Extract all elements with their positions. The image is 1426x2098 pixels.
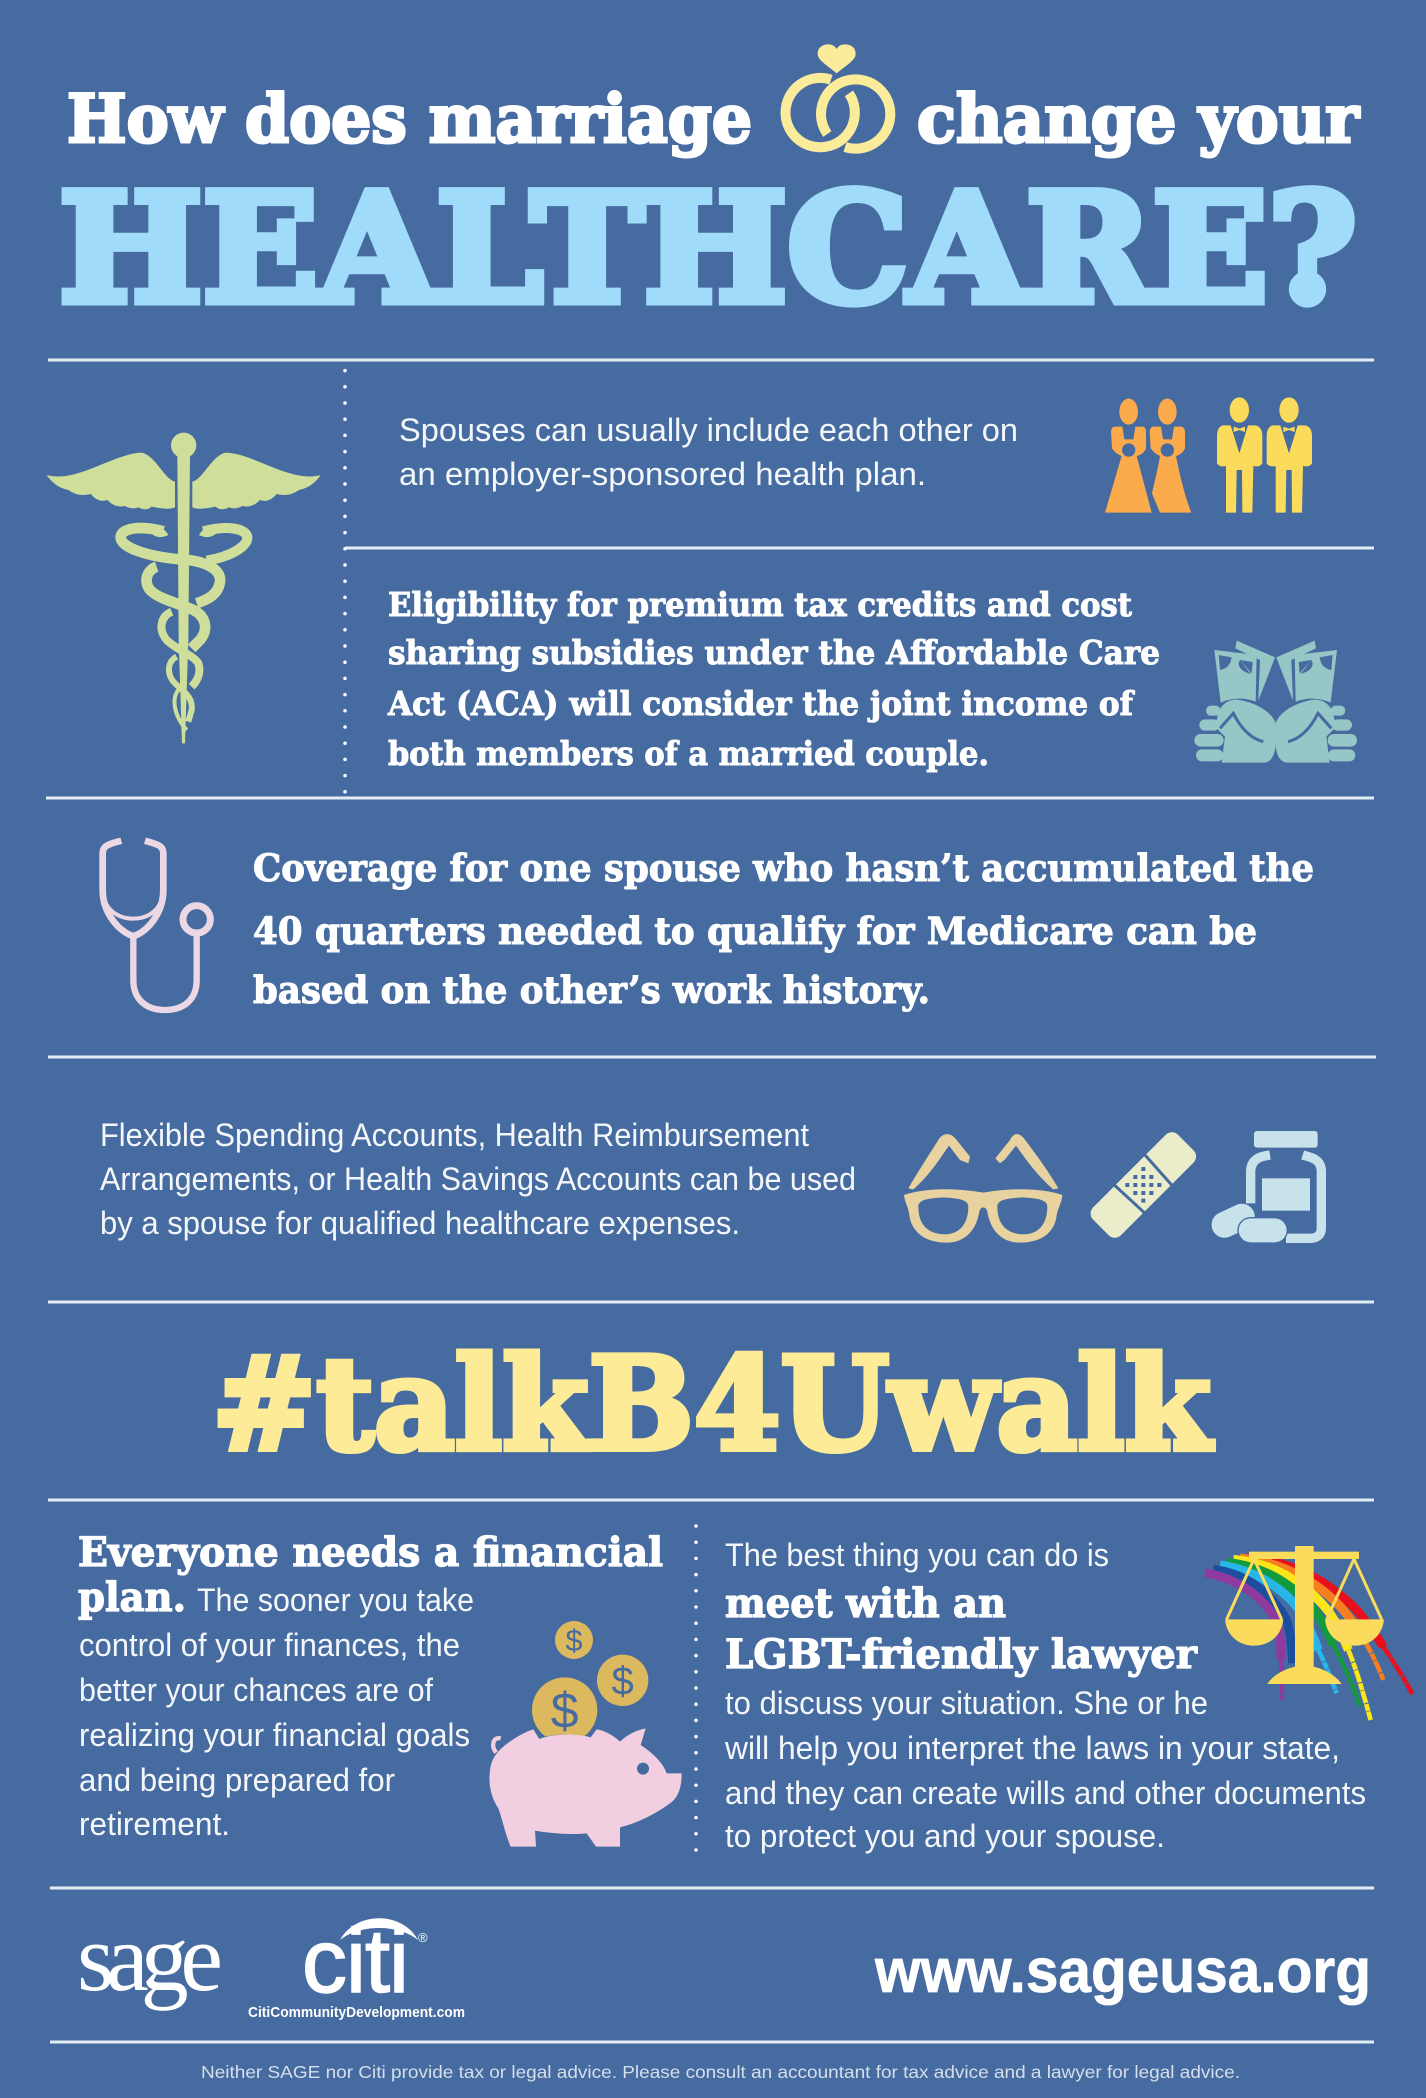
text: medicare work history: 40 quarters needed to qualify for Medicare can be: [253, 909, 1257, 953]
hashtag: #talkB4Uwalk: [212, 1330, 1213, 1480]
text: medicare work history: [253, 846, 1314, 1012]
text: meet with a lawyer: meet with an: [725, 1580, 1006, 1627]
text: spouses can include each other: [399, 412, 1018, 492]
text: flexible spending accounts: by a spouse for qualified healthcare expenses.: [100, 1205, 740, 1241]
text: flexible spending accounts: Flexible Spending Accounts, Health Reimbursement: [100, 1117, 809, 1153]
text: everyone needs a financial plan: Everyone needs a financial: [78, 1529, 663, 1576]
icon: piggy bank with coins: $: [612, 1659, 634, 1703]
icon: glasses: [904, 1134, 1062, 1243]
text: flexible spending accounts: [100, 1117, 856, 1241]
text: meet with a lawyer: to discuss your situation. She or he: [725, 1685, 1208, 1721]
text: eligibility for tax credits: sharing subsidies under the Affordable Care: [388, 633, 1160, 672]
icon: piggy bank with coins: [489, 1621, 682, 1847]
text: spouses can include each other: Spouses can usually include each other on: [399, 412, 1018, 448]
panel: lgbt-friendly lawyer: [724, 1537, 1412, 1854]
text: eligibility for tax credits: Act (ACA) will consider the joint income of: [387, 684, 1135, 723]
icon: scales of justice with rainbow: [1205, 1546, 1412, 1720]
panel: financial plan: [78, 1529, 682, 1847]
text: medicare work history: Coverage for one spouse who hasn’t accumulated the: [253, 846, 1314, 890]
icon: bandage: [1087, 1129, 1200, 1241]
panel: spouses on employer plan: [399, 397, 1312, 513]
text: everyone needs a financial plan: better your chances are of: [79, 1672, 433, 1708]
text: spouses can include each other: an employer-sponsored health plan.: [399, 456, 926, 492]
text: meet with a lawyer: and they can create wills and other documents: [725, 1775, 1366, 1811]
icon: stethoscope: [103, 841, 210, 1010]
icon: hands holding money: [1194, 641, 1357, 763]
website url: www.sageusa.org: [874, 1937, 1371, 2006]
text: eligibility for tax credits: [387, 585, 1160, 773]
icon: caduceus: [47, 433, 321, 743]
divider lines: [46, 360, 1376, 2042]
text: everyone needs a financial plan: and being prepared for: [79, 1762, 395, 1798]
panel: logos and website: [77, 1904, 1371, 2021]
panel: premium tax credits: [387, 585, 1357, 773]
heading line: change your: change your: [917, 80, 1360, 158]
text: everyone needs a financial plan: realizing your financial goals: [79, 1717, 470, 1753]
text: flexible spending accounts: Arrangements, or Health Savings Accounts can be used: [100, 1161, 856, 1197]
logo: citi: ®: [418, 1930, 428, 1945]
logo: citi: CitiCommunityDevelopment.com: [248, 2004, 465, 2021]
footer disclaimer: Neither SAGE nor Citi provide tax or legal advice. Please consult an accountant for tax advice and a lawyer for legal advice.: [201, 2062, 1240, 2082]
text: medicare work history: based on the other’s work history.: [253, 968, 930, 1012]
panel: spending accounts: [100, 1117, 1321, 1244]
text: everyone needs a financial plan: plan.: [78, 1574, 186, 1621]
text: meet with a lawyer: [724, 1537, 1366, 1854]
title: [59, 44, 1360, 337]
text: eligibility for tax credits: both members of a married couple.: [388, 734, 989, 773]
icon: wedding rings with heart: [786, 44, 890, 149]
heading line: healthcare: HEALTHCARE?: [59, 161, 1357, 337]
logo: citi: citi: [302, 1912, 409, 2012]
icon: piggy bank with coins: $: [565, 1624, 583, 1658]
icon: pill bottle: [1207, 1131, 1321, 1244]
text: eligibility for tax credits: Eligibility for premium tax credits and cost: [388, 585, 1133, 624]
logo: citi: [248, 1912, 465, 2021]
panel: medicare coverage: [103, 841, 1314, 1012]
icon: two brides and two grooms: [1105, 397, 1312, 513]
text: meet with a lawyer: LGBT-friendly lawyer: [725, 1631, 1198, 1678]
logo: sage: sage: [77, 1904, 223, 2011]
text: everyone needs a financial plan: retirement.: [79, 1806, 230, 1842]
text: everyone needs a financial plan: The sooner you take: [197, 1582, 474, 1618]
icon: piggy bank with coins: $: [551, 1683, 579, 1739]
text: everyone needs a financial plan: [78, 1529, 663, 1842]
text: meet with a lawyer: will help you interpret the laws in your state,: [724, 1730, 1340, 1766]
heading line: how does marriage: How does marriage: [67, 80, 752, 158]
text: meet with a lawyer: The best thing you can do is: [725, 1537, 1109, 1573]
text: meet with a lawyer: to protect you and your spouse.: [725, 1818, 1165, 1854]
text: everyone needs a financial plan: control of your finances, the: [79, 1627, 460, 1663]
